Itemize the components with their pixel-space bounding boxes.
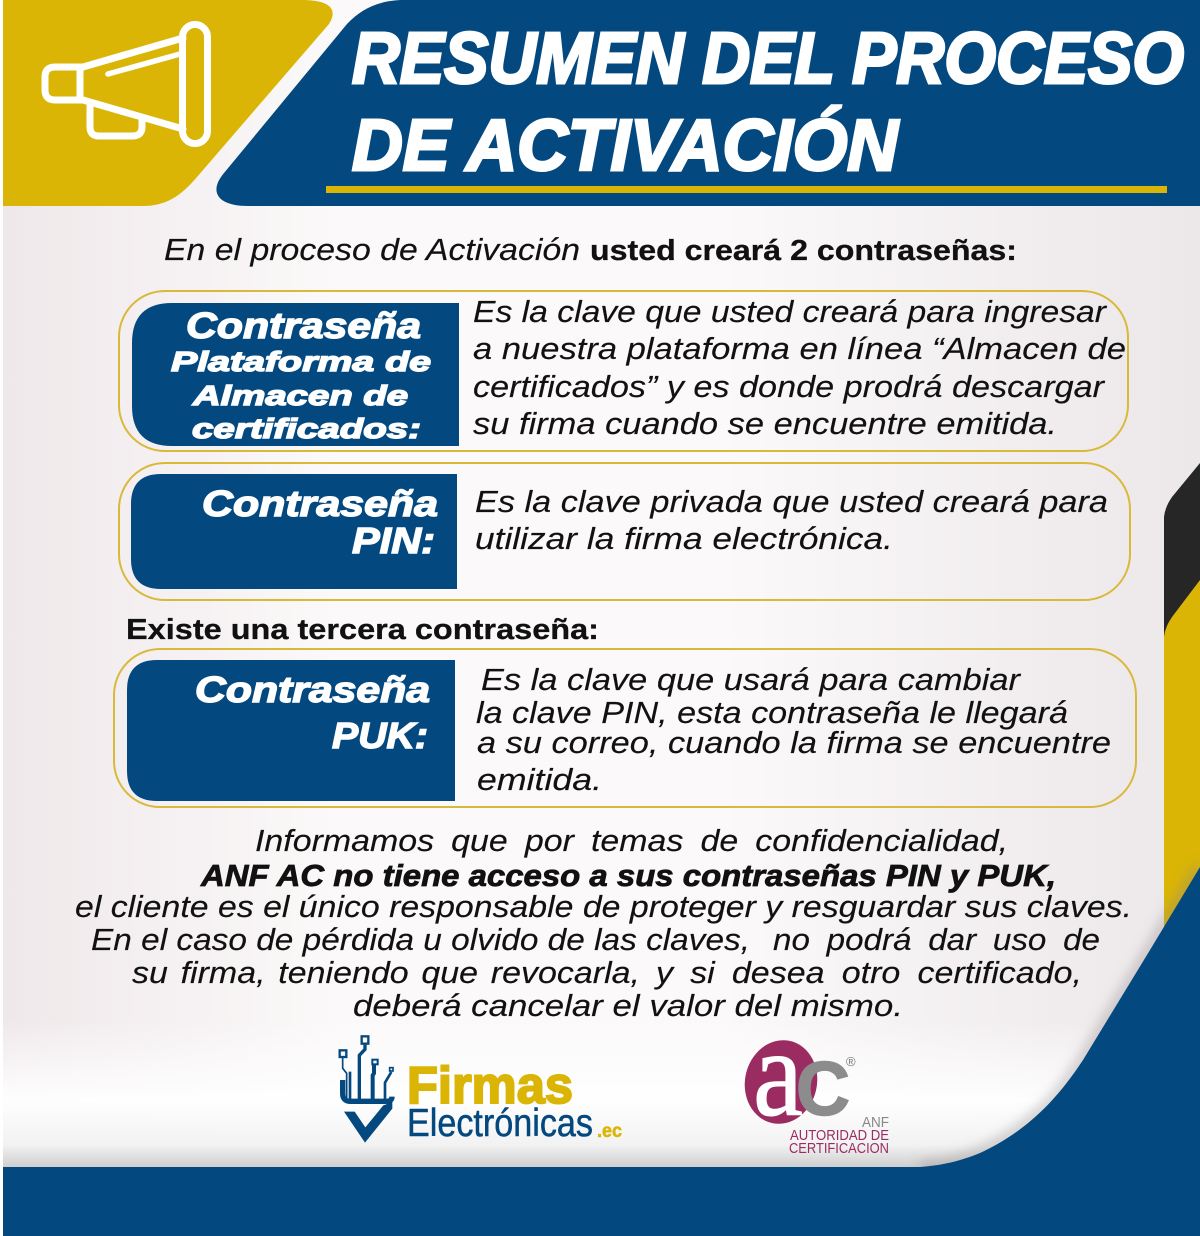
heading: PIN: PIN: — [352, 520, 435, 561]
confidentiality notice: el cliente es el único responsable de proteger y resguardar sus claves. — [75, 889, 1132, 924]
ANF text: CERTIFICACION — [789, 1140, 889, 1157]
logo: Firmas Electrónicas — [340, 1036, 622, 1145]
registered mark: ® — [846, 1054, 856, 1069]
confidentiality notice: deberá cancelar el valor del mismo. — [353, 988, 903, 1023]
heading: PUK: Contraseña — [195, 669, 430, 710]
confidentiality notice: Informamos que por temas de confidencialidad, — [255, 823, 1008, 858]
panel: right side decoration — [920, 463, 1200, 1167]
description: plataforma — [473, 294, 1126, 441]
letter: c: C — [796, 1047, 850, 1132]
title: DE ACTIVACIÓN — [352, 106, 900, 186]
icon: circuit pencil — [340, 1036, 393, 1143]
description: PIN — [475, 484, 1108, 556]
confidentiality notice: no podrá dar uso de — [773, 922, 1100, 957]
ANF text — [789, 1114, 889, 1157]
logo: ANF AC — [737, 1005, 889, 1157]
description: plataforma: a nuestra plataforma en línea “Almacen de — [473, 331, 1126, 366]
ANF text: AUTORIDAD DE — [790, 1127, 889, 1144]
confidentiality notice: En el caso de pérdida u olvido de las claves, — [91, 922, 750, 957]
wordmark: .ec: .ec — [597, 1121, 622, 1142]
heading: PUK: PUK: — [332, 715, 428, 756]
confidentiality notice: ANF AC no tiene acceso a sus contraseñas PIN y PUK, — [200, 858, 1056, 893]
description: PUK: Es la clave que usará para cambiar — [481, 662, 1022, 697]
panel: contraseña PUK — [114, 649, 1136, 807]
description: PIN: Es la clave privada que usted creará para — [475, 484, 1108, 519]
heading: PIN — [202, 483, 438, 561]
heading: plataforma — [171, 305, 431, 444]
letter: a: a — [753, 1005, 803, 1142]
panel: blue title header — [216, 0, 1200, 206]
label box: PIN — [131, 474, 457, 589]
heading: plataforma: Plataforma de — [171, 346, 431, 377]
panel: contraseña plataforma — [119, 291, 1128, 451]
confidentiality notice: y si desea otro certificado, — [654, 955, 1082, 990]
label box: plataforma — [132, 303, 459, 446]
ANF text: ANF — [862, 1114, 889, 1131]
subheading: tercera contraseña: Existe una tercera contraseña: — [126, 614, 599, 646]
footer bar — [3, 1167, 1200, 1236]
description: plataforma: Es la clave que usted creará para ingresar — [473, 294, 1108, 329]
description: PUK: emitida. — [477, 762, 602, 797]
title underline — [326, 186, 1167, 193]
description: PUK — [476, 662, 1111, 797]
heading: plataforma: Almacen de — [192, 380, 408, 411]
heading: plataforma: certificados: — [192, 413, 421, 444]
description: plataforma: certificados” y es donde prodrá descargar — [473, 369, 1106, 404]
description: PUK: la clave PIN, esta contraseña le llegará — [476, 695, 1068, 730]
heading: PUK — [195, 669, 430, 756]
wordmark: Firmas: Firmas — [407, 1057, 573, 1115]
heading: plataforma: Contraseña — [186, 305, 421, 346]
wordmark: Electrónicas: Electrónicas — [407, 1102, 593, 1145]
icon: megaphone — [45, 24, 208, 144]
intro text — [164, 232, 1017, 267]
intro text: usted creará 2 contraseñas: — [590, 235, 1017, 267]
description: PIN: utilizar la firma electrónica. — [475, 521, 893, 556]
description: plataforma: su firma cuando se encuentre emitida. — [473, 406, 1057, 441]
title — [352, 19, 1184, 186]
intro text: En el proceso de Activación — [164, 232, 580, 267]
confidentiality notice — [75, 823, 1132, 1023]
label box: PUK — [127, 660, 455, 801]
description: PUK: a su correo, cuando la firma se encuentre — [477, 725, 1111, 760]
confidentiality notice: su firma, teniendo que revocarla, — [132, 955, 640, 990]
heading: PIN: Contraseña — [202, 483, 438, 524]
icon: purple ellipse — [737, 1033, 825, 1131]
panel: yellow header corner — [3, 0, 333, 206]
panel: contraseña PIN — [119, 463, 1130, 600]
